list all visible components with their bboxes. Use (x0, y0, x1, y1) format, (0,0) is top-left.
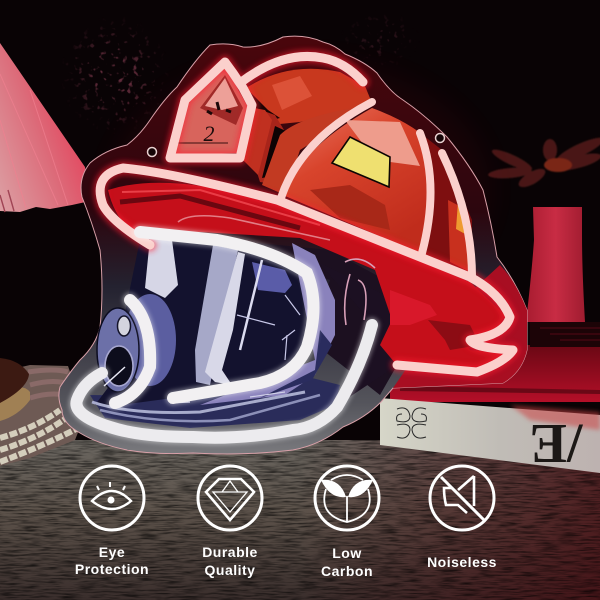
side plate (456, 202, 467, 235)
label: noiseless: Noiseless (427, 554, 497, 570)
book title: /E (530, 412, 583, 474)
icon: muted speaker (430, 466, 494, 530)
side block (250, 106, 287, 185)
book (380, 398, 600, 474)
shield chin fill (90, 375, 340, 428)
lower neon tube (76, 325, 372, 438)
label: durable quality: Quality (205, 562, 255, 578)
vase with flowers (488, 134, 600, 322)
rear shell (424, 136, 472, 280)
badge neon tube (170, 62, 252, 158)
visor neon tube (140, 232, 314, 398)
wooden coaster (0, 358, 30, 421)
carpet floor (0, 440, 600, 600)
feature: eye protection (75, 466, 149, 577)
table lamp shade (0, 43, 90, 212)
respirator neon tube (115, 300, 150, 403)
mounting holes (148, 134, 444, 156)
label: low carbon: Low (332, 545, 362, 561)
brim neon tube (100, 168, 513, 372)
neck strap lines (345, 259, 375, 325)
feature: noiseless (427, 466, 497, 570)
red ambient glow (110, 60, 490, 320)
yellow plate (332, 137, 390, 187)
respirator (97, 294, 176, 392)
wall speckles (66, 16, 411, 129)
vase (526, 207, 585, 322)
red neon glow (100, 57, 513, 372)
helmet shell (240, 69, 472, 280)
label: eye protection: Protection (75, 561, 149, 577)
label: eye protection: Eye (99, 544, 125, 560)
woven mat (0, 365, 85, 466)
dome dark facets (310, 185, 390, 230)
shield interior (95, 232, 315, 405)
badge number: 2 (204, 121, 214, 146)
feature icons row (75, 466, 497, 579)
main dome (285, 108, 430, 254)
feature: low carbon (315, 466, 379, 579)
acrylic backing (59, 36, 527, 454)
neon helmet sign (59, 36, 527, 454)
white neon glow (76, 232, 372, 438)
top neon tube (240, 56, 363, 83)
label: durable quality: Durable (202, 544, 258, 560)
label: low carbon: Carbon (321, 563, 373, 579)
flowers (488, 134, 600, 191)
grey visor stripe (195, 245, 238, 385)
face shield (90, 232, 340, 428)
number badge (174, 66, 272, 175)
icon: sprout (315, 466, 379, 530)
icon: eye (80, 466, 144, 530)
purple side shape (200, 243, 335, 405)
mid shell (262, 105, 372, 195)
top ridge (240, 69, 372, 125)
pale panel (145, 238, 178, 298)
blue reflection (252, 262, 292, 293)
helmet neon ribs (281, 102, 472, 277)
book spine (380, 398, 600, 473)
acrylic red right corner (393, 265, 527, 388)
icon: diamond (198, 466, 262, 530)
shield chin lines (92, 392, 305, 413)
book monogram (397, 408, 426, 438)
red table and glow (390, 322, 600, 402)
under-brim (108, 183, 505, 400)
feature: durable quality (198, 466, 262, 578)
pink shadow on spine (510, 405, 600, 430)
